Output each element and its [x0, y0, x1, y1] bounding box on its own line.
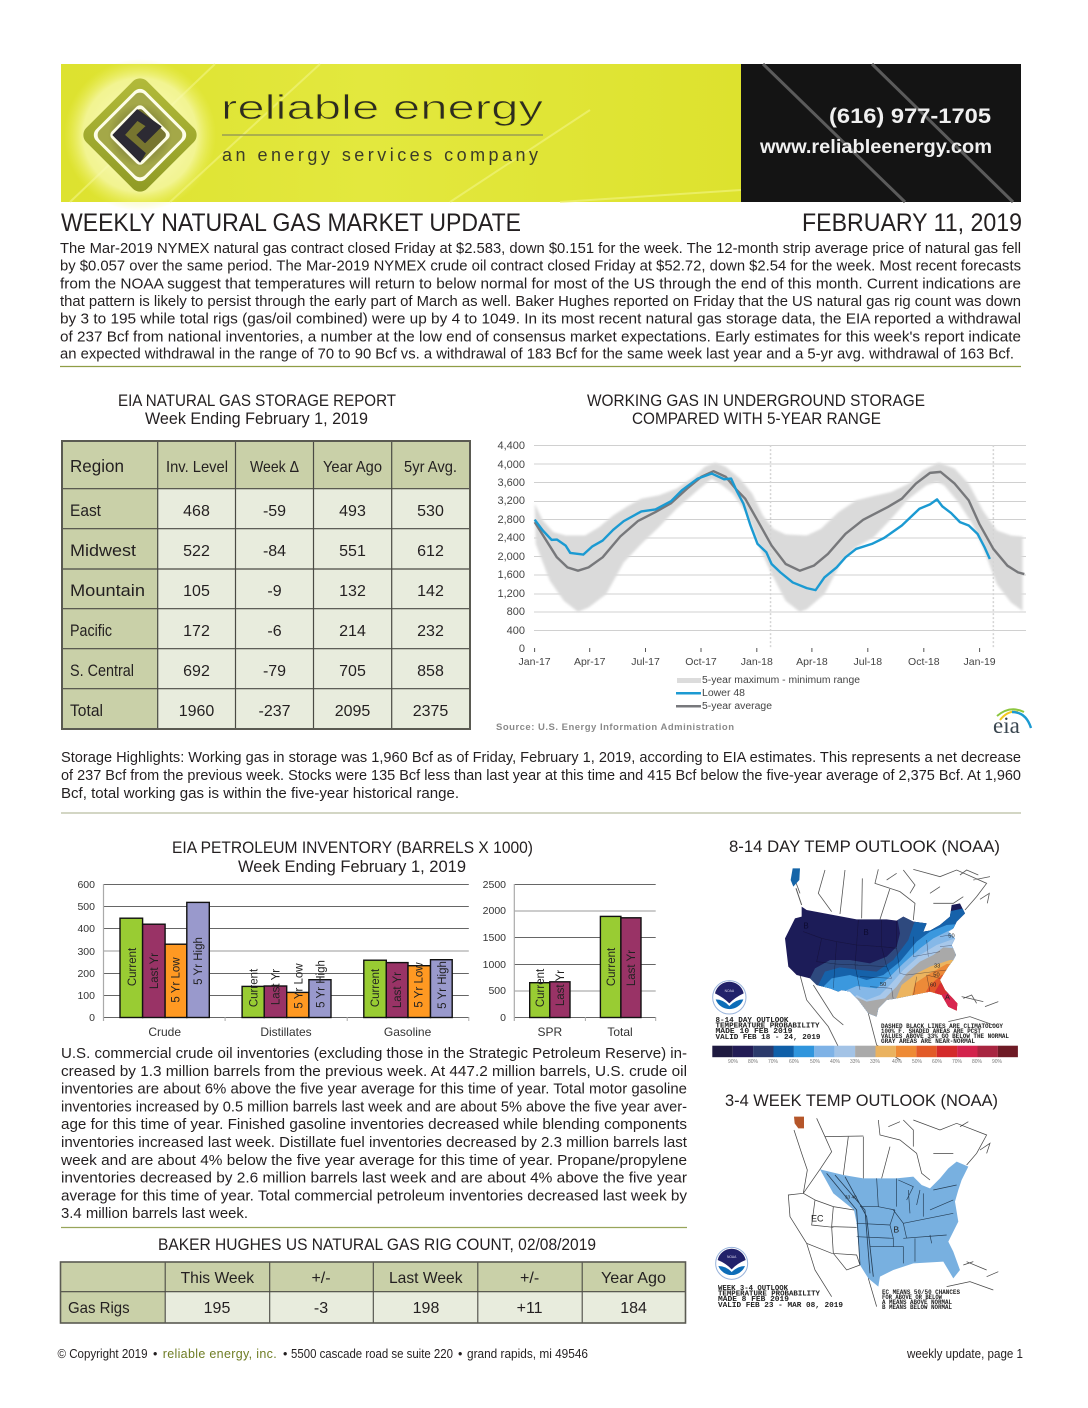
- y axis labels: 2,400: [497, 532, 525, 544]
- map base lines: [788, 1118, 998, 1307]
- y axis labels: 1500: [483, 932, 506, 944]
- y axis labels: 0: [519, 643, 525, 655]
- panel: storage report: [62, 392, 470, 729]
- intro paragraph: The Mar-2019 NYMEX natural gas contract closed Friday at $2.583, down $0.151 for the week. The 12-month strip average price of natural gas fell: [60, 241, 1021, 257]
- map caption: 8-14 day left: MADE 10 FEB 2019: [716, 1028, 793, 1036]
- x axis: Oct-17: [685, 656, 717, 668]
- category labels: [537, 1025, 633, 1039]
- header row: +/-: [520, 1270, 539, 1287]
- y axis labels: 500: [77, 901, 95, 913]
- map caption: 8-14 day right: DASHED BLACK LINES ARE CLIMATOLOGY: [881, 1023, 1003, 1030]
- map: 3-4 week temperature: [716, 1117, 998, 1307]
- table row: East: 468: [183, 503, 210, 520]
- table header row: 5yr Avg.: [404, 459, 457, 476]
- map caption: 3-4 week left: WEEK 3-4 OUTLOOK: [718, 1285, 788, 1293]
- y axis labels: 1000: [483, 959, 506, 971]
- panel: working gas chart: [496, 392, 1031, 738]
- bars: gasoline: 5 Yr High: [437, 961, 449, 1009]
- table row: Pacific: -6: [267, 623, 282, 640]
- table row: Total: -237: [258, 703, 291, 720]
- x axis: Oct-18: [908, 656, 940, 668]
- table row: Pacific: 172: [183, 623, 210, 640]
- panel: 8-14 day outlook: [712, 838, 1033, 1065]
- date: FEBRUARY 11, 2019: [802, 209, 1022, 237]
- petroleum paragraph: average for this time of year. Total commercial petroleum inventories decreased last week by: [61, 1188, 688, 1204]
- bars: distillates: 5 Yr Low: [294, 963, 306, 1009]
- bars: total: Last Yr: [626, 950, 638, 986]
- heading: 8-14 day outlook: 8-14 DAY TEMP OUTLOOK (NOAA): [729, 838, 1000, 856]
- category labels: SPR: [537, 1025, 562, 1039]
- map caption: 3-4 week right: [882, 1289, 960, 1311]
- bars: gasoline: [364, 960, 452, 1018]
- bars: SPR: [530, 968, 570, 1018]
- y axis labels: 2,800: [497, 514, 525, 526]
- y axis labels: 2,000: [497, 551, 525, 563]
- icon: NOAA logo: NOAA: [727, 1255, 737, 1259]
- x axis: Jan-19: [964, 656, 996, 668]
- bars: distillates: Last Yr: [270, 969, 282, 1005]
- table row: East: 530: [417, 503, 444, 520]
- footer: grand rapids, mi 49546: [467, 1347, 588, 1361]
- intro paragraph: [60, 241, 1021, 362]
- footer: weekly update, page 1: [906, 1347, 1023, 1361]
- table header row: Week Δ: [250, 459, 299, 476]
- storage highlights paragraph: of 237 Bcf from the previous week. Stocks were 135 Bcf less than last year at this time and 415 Bcf below the five-year average of 2,375 Bcf. At 1,960: [61, 768, 1021, 784]
- heading: storage report: EIA NATURAL GAS STORAGE REPORT: [118, 392, 396, 410]
- map value labels: [803, 921, 955, 1001]
- footer: •: [153, 1347, 157, 1361]
- table row: Midwest: -84: [263, 543, 286, 560]
- map caption: 3-4 week left: MADE 8 FEB 2019: [718, 1296, 790, 1304]
- table header row: Region: [70, 456, 124, 476]
- intro paragraph: of 237 Bcf from national inventories, a number at the low end of consensus market expectations. Early estimates for this week's report indicate: [60, 329, 1021, 345]
- intro paragraph: by $0.057 over the same period. The Mar-2019 NYMEX crude oil contract closed Friday at $52.72, down $2.54 for the week. Most recent forecasts: [60, 259, 1021, 275]
- y axis labels: 400: [77, 923, 95, 935]
- map caption: 3-4 week left: TEMPERATURE PROBABILITY: [718, 1290, 820, 1298]
- petroleum paragraph: inventories decreased by 2.6 million barrels last week and are about 4% above the five year: [61, 1171, 687, 1187]
- icon: NOAA logo: [713, 981, 746, 1014]
- header banner: [61, 59, 1021, 211]
- y axis labels: [483, 879, 506, 1024]
- table header row: Inv. Level: [166, 459, 228, 476]
- y axis labels: [77, 879, 95, 1024]
- y axis labels: 3,600: [497, 477, 525, 489]
- table row: Mountain: 105: [183, 583, 210, 600]
- data row: -3: [314, 1300, 328, 1317]
- table row: S. Central: 692: [183, 663, 210, 680]
- table row: Total: [70, 701, 448, 720]
- y axis labels: 400: [507, 625, 525, 637]
- y axis labels: 2500: [483, 879, 506, 891]
- table row: East: -59: [263, 503, 286, 520]
- map caption: 8-14 day right: [881, 1023, 1009, 1045]
- y axis labels: 200: [77, 968, 95, 980]
- table row: Pacific: Pacific: [70, 621, 112, 640]
- legend: probability color scale: 40%: [830, 1059, 841, 1065]
- state lines: [803, 920, 957, 1000]
- data row: +11: [517, 1300, 543, 1317]
- line chart: working gas: [496, 440, 1031, 738]
- bars: distillates: [242, 960, 331, 1018]
- petroleum paragraph: inventories are about 6% above the five year average for this time of year. Total motor gasoline: [61, 1082, 687, 1098]
- map value labels: 50: [948, 933, 955, 939]
- map caption: 8-14 day right: 100% F. SHADED AREAS ARE PCST: [881, 1028, 981, 1035]
- title: WEEKLY NATURAL GAS MARKET UPDATE: [61, 209, 521, 237]
- legend: probability color scale: 50%: [912, 1059, 923, 1065]
- table row: East: 493: [339, 503, 366, 520]
- petroleum paragraph: inventories increased by 0.5 million barrels last week and are about 5% above the five year aver-: [61, 1099, 687, 1115]
- table row: Midwest: 522: [183, 543, 210, 560]
- x axis: [519, 648, 996, 668]
- temperature probability bands: [785, 903, 965, 1017]
- legend: probability color scale: 90%: [728, 1059, 739, 1065]
- map caption: 8-14 day left: VALID FEB 18 - 24, 2019: [716, 1034, 821, 1042]
- y axis labels: 0: [500, 1012, 506, 1024]
- icon: EIA logo: [993, 709, 1031, 738]
- map value labels: B: [803, 921, 809, 930]
- bars: gasoline: Current: [370, 968, 382, 1007]
- table row: East: East: [70, 501, 101, 520]
- table row: Mountain: -9: [267, 583, 282, 600]
- y axis labels: 500: [488, 985, 506, 997]
- heading: working gas chart: COMPARED WITH 5-YEAR RANGE: [632, 410, 881, 428]
- map value labels: B: [863, 928, 869, 937]
- icon: NOAA logo: NOAA: [725, 989, 735, 993]
- table row: S. Central: -79: [263, 663, 286, 680]
- table: rig count: [60, 1262, 686, 1323]
- chart legend: [676, 675, 860, 712]
- petroleum paragraph: creased by 1.3 million barrels from the previous week. At 447.2 million barrels, U.S. crude oil: [61, 1064, 687, 1080]
- heading: 3-4 week outlook: 3-4 WEEK TEMP OUTLOOK (NOAA): [725, 1092, 998, 1110]
- legend: probability color scale: 60%: [789, 1059, 800, 1065]
- x axis: Jul-17: [631, 656, 660, 668]
- table header row: [70, 456, 457, 476]
- table row: Midwest: 612: [417, 543, 444, 560]
- legend: probability color scale: [712, 1046, 1018, 1065]
- table row: Pacific: [70, 621, 444, 640]
- map caption: 8-14 day left: 8-14 DAY OUTLOOK: [716, 1017, 789, 1025]
- legend: probability color scale: 33%: [870, 1059, 881, 1065]
- range band: [535, 462, 1023, 612]
- table row: Mountain: Mountain: [70, 581, 145, 600]
- map caption: 3-4 week right: FOR ABOVE OR BELOW: [882, 1294, 942, 1301]
- heading: petroleum inventory: Week Ending February 1, 2019: [238, 858, 466, 876]
- table row: Mountain: 142: [417, 583, 444, 600]
- lower 48 line: [535, 474, 990, 590]
- legend: probability color scale: 90%: [992, 1059, 1003, 1065]
- table row: S. Central: 858: [417, 663, 444, 680]
- bars: gasoline: 5 Yr Low: [414, 962, 426, 1008]
- table row: Mountain: 132: [339, 583, 366, 600]
- icon: EIA logo: eia: [993, 713, 1020, 738]
- x axis: Apr-18: [796, 656, 828, 668]
- bars: distillates: Current: [248, 968, 260, 1007]
- table row: Mountain: [70, 581, 444, 600]
- chart legend: 5-year maximum - minimum range: [702, 675, 860, 686]
- y axis labels: 600: [77, 879, 95, 891]
- category labels: Distillates: [260, 1025, 312, 1039]
- map: 8-14 day temperature: [712, 868, 998, 1060]
- x axis: Jul-18: [853, 656, 882, 668]
- header row: [181, 1270, 666, 1287]
- map caption: 3-4 week left: VALID FEB 23 - MAR 08, 2019: [718, 1302, 844, 1310]
- legend: probability color scale: 70%: [952, 1059, 963, 1065]
- y axis labels: 3,200: [497, 495, 525, 507]
- map labels: 33 40: [845, 1195, 857, 1200]
- y axis labels: 0: [89, 1012, 95, 1024]
- table row: East: [70, 501, 444, 520]
- logo wordmark: reliable energy: [221, 89, 543, 127]
- bars: SPR: Current: [535, 968, 547, 1007]
- map caption: 3-4 week right: B MEANS BELOW NORMAL: [882, 1304, 952, 1311]
- bars: SPR: Last Yr: [555, 970, 567, 1006]
- header row: Year Ago: [601, 1270, 666, 1287]
- bars: total: Current: [606, 947, 618, 986]
- y axis labels: [497, 440, 525, 655]
- map value labels: 60: [930, 983, 936, 989]
- petroleum paragraph: 3.4 million barrels last week.: [61, 1206, 248, 1222]
- banner: black contact panel: [741, 64, 1021, 202]
- below-normal shaded region: [820, 1162, 968, 1287]
- category labels: Gasoline: [384, 1025, 432, 1039]
- chart legend: 5-year average: [702, 701, 772, 712]
- footer: •: [283, 1347, 287, 1361]
- y axis labels: 2000: [483, 905, 506, 917]
- legend: probability color scale: 70%: [768, 1059, 779, 1065]
- bars: crude: Current: [127, 947, 139, 986]
- map value labels: A: [945, 992, 950, 1001]
- legend: probability color scale: 80%: [748, 1059, 759, 1065]
- map caption: 8-14 day right: GRAY AREAS ARE NEAR-NORMAL: [881, 1038, 975, 1045]
- bars: gasoline: Last Yr: [392, 972, 404, 1008]
- intro paragraph: an expected withdrawal in the range of 70 to 90 Bcf vs. a withdrawal of 183 Bcf for the same week last year and a 5-yr avg. withdrawal of 163 Bcf.: [60, 346, 1014, 362]
- bars: total: [600, 916, 641, 1018]
- panel: rig count: [60, 1236, 686, 1323]
- map caption: 8-14 day left: TEMPERATURE PROBABILITY: [716, 1022, 820, 1030]
- chart legend: Lower 48: [702, 688, 745, 699]
- map value labels: 50: [933, 973, 940, 979]
- map labels: [811, 1195, 899, 1235]
- logo: diamond emblem: [64, 59, 216, 211]
- bar chart: SPR and total: [483, 879, 656, 1039]
- footer: reliable energy, inc.: [163, 1347, 277, 1361]
- petroleum paragraph: U.S. commercial crude oil inventories (excluding those in the Strategic Petroleum Reserve) in-: [61, 1046, 687, 1062]
- table row: Total: 2375: [413, 703, 448, 720]
- intro paragraph: from the NOAA suggest that temperatures will return to below normal for most of the US through the end of this month. Current indications are: [60, 276, 1021, 292]
- intro paragraph: that pattern is likely to persist through the early part of March as well. Baker Hughes reported on Friday that the US natural gas rig count was down: [60, 294, 1021, 310]
- footer: [58, 1347, 1023, 1361]
- map caption: 3-4 week right: EC MEANS 50/50 CHANCES: [882, 1289, 960, 1296]
- bars: crude: 5 Yr Low: [170, 957, 182, 1003]
- Alaska panhandle fill: [794, 1117, 804, 1128]
- 5-year average line: [535, 471, 1024, 574]
- website: www.reliableenergy.com: [759, 137, 992, 158]
- map labels: B: [893, 1225, 899, 1235]
- table row: Midwest: [70, 541, 444, 560]
- intro paragraph: by 3 to 195 while total rigs (gas/oil combined) were up by 4 to 1049. In its most recent natural gas storage data, the EIA reported a withdrawal: [60, 312, 1021, 328]
- legend: probability color scale: 33%: [850, 1059, 861, 1065]
- storage highlights paragraph: [61, 750, 1021, 802]
- table row: Total: 1960: [179, 703, 214, 720]
- map caption: 3-4 week right: A MEANS ABOVE NORMAL: [882, 1299, 952, 1306]
- heading: rig count: BAKER HUGHES US NATURAL GAS RIG COUNT, 02/08/2019: [158, 1236, 596, 1254]
- petroleum paragraph: inventories increased last week. Distillate fuel inventories decreased by 2.3 million barrels last: [61, 1135, 687, 1151]
- table row: Pacific: 232: [417, 623, 444, 640]
- table row: Total: 2095: [335, 703, 370, 720]
- header row: +/-: [311, 1270, 331, 1287]
- legend: probability color scale: 80%: [972, 1059, 983, 1065]
- phone number: (616) 977-1705: [829, 105, 991, 128]
- table row: Midwest: Midwest: [70, 541, 136, 560]
- legend: probability color scale: 60%: [932, 1059, 943, 1065]
- footer: © Copyright 2019: [58, 1347, 148, 1361]
- y axis labels: 300: [77, 946, 95, 958]
- y axis labels: 4,400: [497, 440, 525, 452]
- y axis labels: 100: [77, 990, 95, 1002]
- data row: Gas Rigs: [68, 1300, 130, 1317]
- panel: 3-4 week outlook: [716, 1092, 998, 1311]
- heading: petroleum inventory: EIA PETROLEUM INVENTORY (BARRELS X 1000): [172, 839, 533, 857]
- storage highlights paragraph: Bcf, total working gas is within the five-year historical range.: [61, 786, 459, 802]
- category labels: [148, 1025, 432, 1039]
- y axis labels: 1,600: [497, 569, 525, 581]
- table row: Midwest: 551: [339, 543, 366, 560]
- state lines and probability contours: [827, 1173, 957, 1277]
- data row: 198: [413, 1300, 439, 1317]
- storage highlights paragraph: Storage Highlights: Working gas in storage was 1,960 Bcf as of Friday, February 1, 2019, according to EIA estimates. This represents a net decrease: [61, 750, 1021, 766]
- petroleum paragraph: week and are about 4% below the five year average for this time of year. Propane/propylene: [60, 1153, 687, 1169]
- x axis: Jan-18: [741, 656, 773, 668]
- table: storage data: [62, 441, 470, 729]
- banner: yellow logo panel: [61, 59, 741, 211]
- map labels: EC: [811, 1214, 824, 1224]
- x axis: Jan-17: [519, 656, 551, 668]
- petroleum paragraph: age for this time of year. Finished gasoline inventories decreased while blending components: [61, 1117, 687, 1133]
- heading: working gas chart: WORKING GAS IN UNDERGROUND STORAGE: [587, 392, 925, 410]
- category labels: Crude: [148, 1025, 181, 1039]
- bars: crude: Last Yr: [149, 953, 161, 989]
- heading: storage report: Week Ending February 1, 2019: [145, 410, 368, 428]
- data row: [68, 1300, 647, 1317]
- data row: 195: [204, 1300, 230, 1317]
- header row: This Week: [181, 1270, 255, 1287]
- category labels: Total: [607, 1025, 633, 1039]
- heading: storage report: [118, 392, 396, 428]
- table row: S. Central: [70, 661, 444, 680]
- data row: 184: [620, 1300, 647, 1317]
- chart source: Source: U.S. Energy Information Administration: [496, 722, 734, 733]
- table header row: Year Ago: [323, 459, 382, 476]
- legend: probability color scale: 50%: [810, 1059, 821, 1065]
- y axis labels: 800: [507, 606, 525, 618]
- map base lines: [795, 869, 998, 1060]
- table row: S. Central: S. Central: [70, 661, 134, 680]
- logo tagline: an energy services company: [222, 145, 538, 165]
- petroleum paragraph: [60, 1046, 688, 1222]
- table row: Pacific: 214: [339, 623, 366, 640]
- footer: 5500 cascade road se suite 220: [291, 1347, 453, 1361]
- heading: working gas chart: [587, 392, 925, 428]
- bars: crude: 5 Yr High: [193, 937, 205, 985]
- bar chart: crude, distillates, gasoline: [77, 879, 469, 1039]
- bars: crude: [120, 902, 209, 1018]
- table row: Total: Total: [70, 701, 103, 720]
- map caption: 8-14 day left: [716, 1017, 821, 1042]
- legend: probability color scale: 40%: [892, 1059, 903, 1065]
- panel: petroleum inventory: [60, 839, 688, 1222]
- heading: petroleum inventory: [172, 839, 533, 876]
- header row: Last Week: [389, 1270, 463, 1287]
- table row: S. Central: 705: [339, 663, 366, 680]
- y axis labels: 1,200: [497, 588, 525, 600]
- map caption: 3-4 week left: [718, 1285, 844, 1310]
- bars: distillates: 5 Yr High: [316, 960, 328, 1008]
- x axis: Apr-17: [574, 656, 606, 668]
- map value labels: 50: [880, 982, 886, 988]
- map caption: 8-14 day right: VALUES ABOVE 33% GO BELOW THE NORMAL: [881, 1033, 1009, 1040]
- footer: •: [458, 1347, 462, 1361]
- map value labels: 33: [934, 963, 940, 969]
- icon: NOAA logo: [716, 1247, 748, 1279]
- y axis labels: 4,000: [497, 459, 525, 471]
